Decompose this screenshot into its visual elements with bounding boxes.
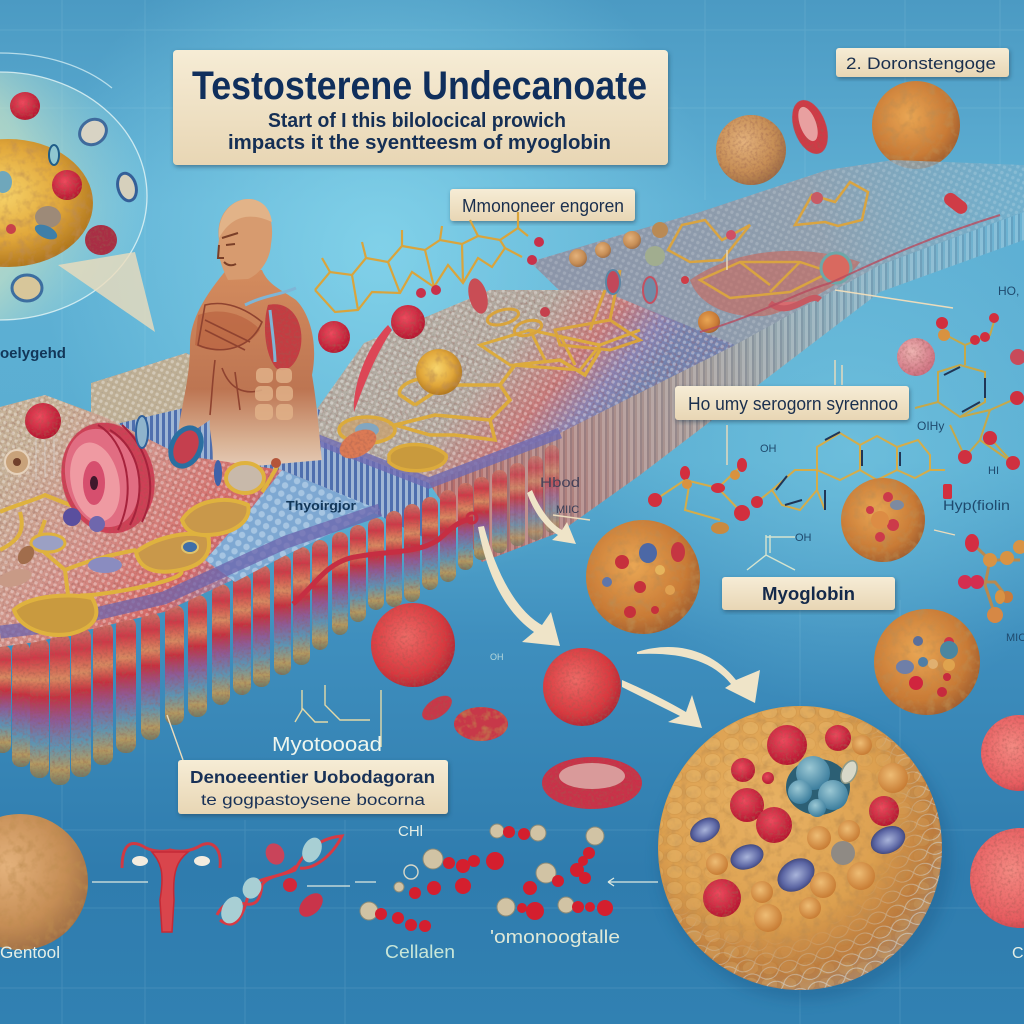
- golden cell: [0, 139, 93, 267]
- label: heavy serogen: [675, 386, 909, 420]
- stippled surface: [300, 290, 735, 483]
- antenna spheres: [540, 231, 665, 317]
- label: top right: [836, 48, 1009, 77]
- arrow three: [637, 647, 760, 703]
- arrow four: [622, 680, 702, 728]
- small label set right: [760, 284, 1024, 644]
- label: lower box: Denoeeentier Uobodagoran: [190, 767, 435, 787]
- coral cell right top: [981, 715, 1024, 791]
- upper capsules and nodes: [318, 231, 665, 412]
- abdomen: [255, 368, 293, 420]
- label: Gentool: Gentool: [0, 943, 60, 962]
- heart organ: [265, 304, 301, 370]
- head: [218, 199, 272, 280]
- label: Cellalen: Cellalen: [385, 942, 455, 962]
- red cell mid: [371, 603, 455, 687]
- tan nucleus and blue rings: [5, 416, 281, 486]
- label: myotoxoid with molecule: [272, 685, 382, 756]
- small Y molecule: [747, 535, 795, 570]
- right molecule upper: [897, 313, 1024, 470]
- chest muscles: [195, 311, 260, 350]
- purple rim of middle block: [300, 433, 560, 483]
- pink patch on far surface: [690, 251, 860, 316]
- left tan blob: [0, 566, 33, 590]
- far nodes: [652, 192, 823, 333]
- red berry small: [318, 321, 350, 353]
- arm and torso: [178, 268, 322, 470]
- membrane far block: [429, 160, 1024, 562]
- red organelles: [703, 725, 899, 917]
- HO right: HO,: [998, 284, 1019, 298]
- middle gold network: [339, 330, 640, 471]
- upper rings: [486, 270, 640, 350]
- red coil disc: [454, 707, 508, 741]
- subtitle line 2: impacts it the syentteesm of myoglobin: [228, 131, 611, 154]
- label: left edge: oelygehd: [0, 345, 66, 362]
- red muscle coil: [49, 412, 167, 544]
- red cell right of mid: [543, 648, 621, 726]
- label: blood: Hbod: [540, 474, 580, 490]
- label: myoglobin: [722, 577, 895, 610]
- near block lipid columns: [0, 445, 559, 785]
- title panel: [173, 50, 668, 165]
- bottom row: tan cell: [0, 814, 88, 950]
- bubble pointer: [58, 252, 155, 332]
- purple spheres: [63, 508, 81, 526]
- lower right molecule: [958, 534, 1024, 623]
- bottom row: arrow to molecules: [307, 882, 376, 886]
- blue cluster: [786, 756, 860, 817]
- label: omonoogtalle: 'omonoogtalle: [490, 926, 620, 947]
- middle columns left side: [300, 433, 429, 540]
- side labels on membrane: [0, 345, 580, 516]
- human figure: [178, 199, 322, 470]
- title: Testosterene Undecanoate: [192, 64, 647, 108]
- label: CHl: CHl: [398, 823, 423, 840]
- far red capsule: [941, 190, 970, 217]
- label: membrane: Thyoirgjor: [286, 499, 356, 513]
- label: mononuclear: [450, 189, 635, 221]
- spheres midfield: [371, 478, 1024, 928]
- label: myotoxoid with molecule: Myotoooad: [272, 734, 382, 756]
- callout lines: [167, 250, 955, 760]
- red vessel: [293, 215, 1000, 604]
- red berry on near block: [25, 403, 61, 480]
- orange organelles: [706, 735, 908, 932]
- OH lower: OH: [795, 532, 812, 544]
- bottom row: DNA helix and capsules: [217, 834, 342, 927]
- bottom row: arrow from big cell: [608, 878, 658, 886]
- red big disc: [542, 757, 642, 809]
- label: OH mid: OH: [490, 652, 504, 662]
- cream arrows: [478, 490, 760, 728]
- bottom row: molecule clusters: [360, 824, 613, 932]
- HI: HI: [988, 465, 999, 477]
- purple organelles: [686, 812, 910, 899]
- bottom row: arrow: [92, 881, 148, 883]
- spotted cell right upper: [841, 478, 925, 562]
- bottom labels: [0, 652, 1024, 962]
- scaled rim: [659, 707, 941, 989]
- bottom row: uterus icon: [122, 844, 220, 932]
- label: top right: 2. Doronstengoge: [846, 55, 996, 73]
- red capsule: [465, 276, 491, 316]
- red disc: [785, 95, 835, 159]
- back tan block: [91, 353, 320, 480]
- small orange blob: [335, 424, 381, 464]
- label: mononuclear: Mmononeer engoren: [462, 196, 624, 216]
- cell body: [658, 706, 942, 990]
- Hypfiolin: Hyp(fiolin: [943, 497, 1010, 513]
- label: lower box: [178, 760, 448, 814]
- lower steroid molecule: [648, 432, 952, 534]
- blood vessels: [245, 288, 296, 362]
- organelles in bubble: [0, 92, 139, 301]
- OH right: OIHy: [917, 419, 944, 433]
- blue rings in sacs: [88, 541, 198, 573]
- face: [218, 233, 238, 265]
- label: mic: MIIC: [556, 504, 579, 516]
- big myoglobin cell: [658, 706, 951, 1000]
- hexagon chain molecule: [315, 212, 544, 312]
- spotted cell right lower: [874, 609, 980, 715]
- label: lower box: te gogpastoysene bocorna: [201, 792, 425, 809]
- label: myoglobin: Myoglobin: [762, 584, 855, 604]
- red capsule: [418, 691, 456, 725]
- OH top: OH: [760, 443, 777, 455]
- orange cell: [872, 81, 960, 169]
- subtitle line 1: Start of I this bilolocical prowich: [268, 109, 566, 132]
- tan cell: [716, 115, 786, 185]
- membrane middle block: [300, 290, 735, 540]
- spotted cell center: [586, 520, 700, 634]
- arrow one: [478, 526, 560, 646]
- red curved sliver: [354, 325, 392, 412]
- far surface: [530, 160, 1024, 380]
- pale membrane lace: [658, 706, 942, 990]
- far columns: [429, 212, 1024, 562]
- arrow two: [527, 490, 576, 544]
- middle tan sphere: [416, 349, 462, 395]
- magnified cell bubble: [0, 53, 155, 332]
- floating cells top right: [716, 81, 960, 185]
- label: heavy serogen: Ho umy serogorn syrennoo: [688, 394, 898, 414]
- coral cell right bottom: [970, 828, 1024, 928]
- purple rim: [0, 510, 380, 632]
- gold network: [0, 463, 278, 635]
- far steroid rings: [668, 182, 868, 262]
- near block top surface: [0, 395, 380, 647]
- label: right edge: C: [1012, 945, 1024, 962]
- blue stippled corner: [205, 470, 380, 582]
- red berry: [391, 305, 425, 339]
